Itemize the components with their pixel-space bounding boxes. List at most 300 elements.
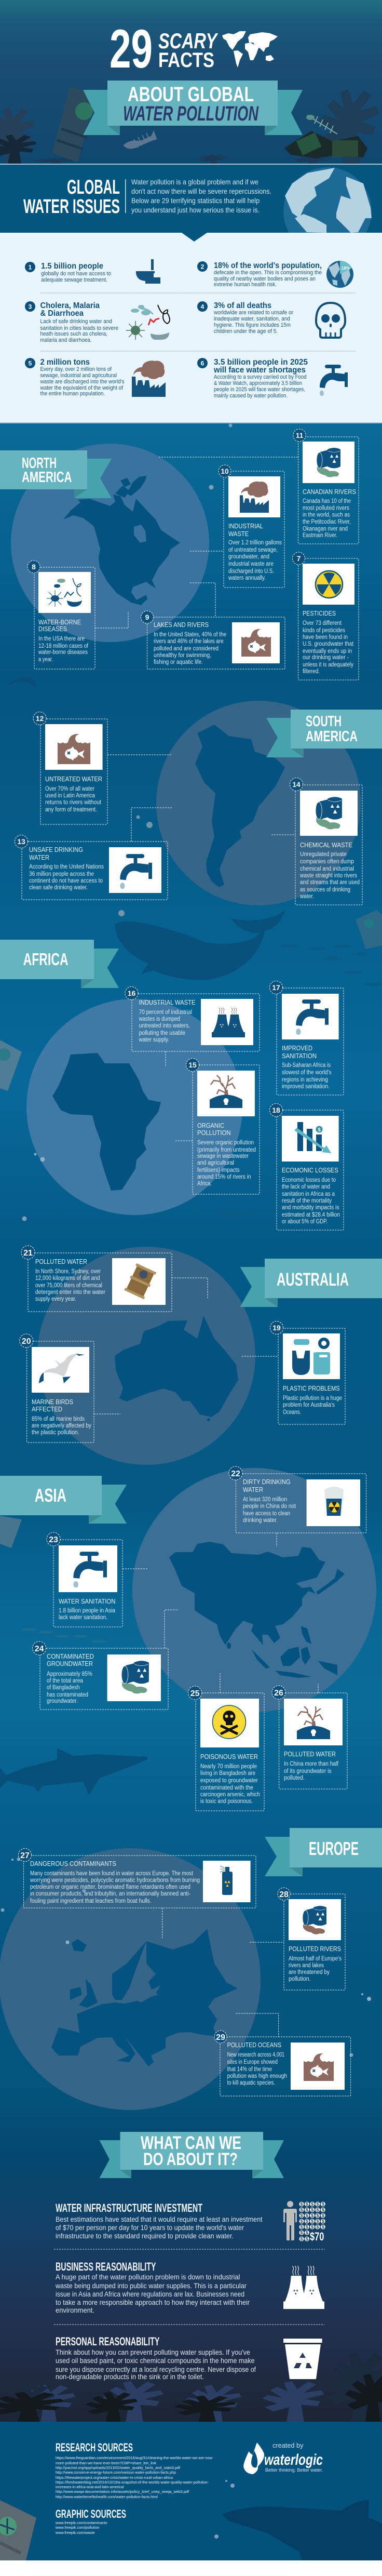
card 9: lakes and rivers: In the United States, 40% of the [154, 632, 226, 638]
ribbon: north america [0, 450, 112, 498]
issue 1: globally do not have access to [41, 271, 111, 277]
card 11: canadian rivers: 11 [296, 431, 304, 439]
issue 3: Cholera, Malaria [40, 301, 100, 310]
text: research sources: https://thewaterproject.org/water-crisis/water-in-crisis-rural-urban-africa [56, 2475, 173, 2480]
card 20: marine birds affected: MARINE BIRDS [32, 1398, 73, 1406]
block: personal responsibility: used oil based paint, or toxic chemical compounds in the home make [56, 2357, 255, 2365]
issue 1: 1 [29, 264, 32, 271]
ribbon: australia: AUSTRALIA [277, 1270, 349, 1290]
card 25: poisonous water: 25 [190, 1689, 200, 1698]
icon: falling bar chart [294, 1122, 331, 1153]
icon: dollar coins and $70: $$$$$ [300, 2219, 324, 2224]
card 13: unsafe drinking water [15, 835, 168, 900]
card 27: dangerous contaminants: in consumer products, and tributyltin, an internationally banned anti- [30, 1891, 190, 1897]
ribbon: about global water pollution: ABOUT GLOBAL [128, 83, 254, 106]
issue 6: people in 2025 will face water shortages, [214, 386, 305, 393]
card 24: contaminated groundwater: of the total area [47, 1678, 84, 1684]
icon: seabird [39, 1354, 85, 1383]
heading: global water issues [23, 176, 120, 218]
illustration: shark [0, 1748, 147, 1795]
card 22: dirty drinking water: people in China do not [243, 1503, 296, 1510]
card 13: unsafe drinking water: clean safe drinking water. [29, 885, 88, 891]
card 11: canadian rivers: the Petitcodiac River, [303, 519, 351, 525]
icon: floating bottles [284, 131, 367, 158]
card 27: dangerous contaminants: DANGEROUS CONTAMINANTS [30, 1860, 116, 1867]
issue 2: 18% of the world's population, [214, 261, 322, 270]
card 8: water-borne diseases: In the USA there are [38, 636, 85, 642]
block: water infrastructure investment [56, 2201, 324, 2243]
issue 4: inadequate water, sanitation, and [214, 316, 290, 322]
card 29: polluted oceans [214, 2031, 351, 2096]
card 18: economic losses: result of the mortality [282, 1198, 332, 1204]
card 7: pesticides: unless it is adequately [303, 662, 353, 668]
card 21: polluted water: detergent enter into the water [35, 1289, 105, 1296]
card 21: polluted water [21, 1246, 172, 1312]
issue 4: 4 [201, 303, 204, 311]
card 13: unsafe drinking water: 36 million people across the [29, 871, 94, 877]
card 28: polluted rivers: 28 [279, 1890, 289, 1899]
ribbon: asia [0, 1476, 127, 1524]
issue 3 [25, 301, 170, 343]
card 18: economic losses: or about 5% of GDP. [282, 1219, 328, 1225]
card 7: pesticides: eventually ends up in [303, 648, 352, 655]
icon: person [283, 2201, 297, 2240]
illustration: shark [222, 2500, 382, 2560]
card 25: poisonous water: is toxic and poisonous. [200, 1798, 253, 1805]
card 9: lakes and rivers: 9 [145, 613, 149, 621]
issue 3: heath issues such as cholera, [40, 331, 107, 337]
card 16: industrial waste: untreated into waters, [139, 1023, 190, 1029]
icon: dollar coins and $70: $$$$$ [300, 2213, 324, 2218]
card 14: chemical waste: and streams that are used [300, 879, 360, 886]
card 7: pesticides: U.S. groundwater that [303, 641, 354, 647]
card 28: polluted rivers [278, 1888, 345, 1990]
text: research sources [56, 2441, 213, 2499]
icon: microbes [126, 305, 170, 340]
card 29: polluted oceans: that 14% of the time [227, 2066, 272, 2073]
card 8: water-borne diseases: water-borne diseases [38, 649, 88, 656]
icon: fish skeleton [124, 131, 157, 149]
icon: dollar coins and $70: $$$$$ [300, 2201, 324, 2207]
card 8: water-borne diseases [28, 560, 95, 669]
issue 5: the entire human population. [40, 391, 105, 397]
issue 6: will face water shortages [213, 366, 306, 375]
card 15: organic pollution [186, 1059, 260, 1194]
card 24: contaminated groundwater: 24 [35, 1645, 44, 1653]
map: north america [45, 476, 180, 605]
text: research sources: http://www.conserve-energy-future.com/various-water-pollution-facts.php [56, 2470, 176, 2475]
issue 2: quality of nearby water bodies and poses an [214, 276, 316, 282]
card 28: polluted rivers: are threatened by [289, 1969, 330, 1976]
ribbon: north america: NORTH [22, 455, 57, 472]
block: personal responsibility: non-degradable products in the sink or in the toilet. [56, 2373, 204, 2381]
icon: radiation sign [316, 571, 343, 598]
card 13: unsafe drinking water: continent do not have access to [29, 878, 103, 884]
card 14: chemical waste: as sources of drinking [300, 887, 350, 893]
card 28: polluted rivers: rivers and lakes [289, 1963, 324, 1969]
icon: dollar coins and $70: $$ [300, 2230, 308, 2235]
icon: falling bar chart: $ [318, 1127, 321, 1133]
card 14: chemical waste: CHEMICAL WASTE [300, 842, 352, 849]
card 7: pesticides: kinds of pesticides [303, 628, 345, 634]
card 18: economic losses: 18 [272, 1106, 280, 1114]
text: research sources: https://freshwaterblog.net/2016/10/19/a-snapshot-of-the-worlds-water-quality-water-pollution- [56, 2480, 209, 2485]
card 23: water sanitation: lack water sanitation. [59, 1614, 107, 1621]
panel: ocean background [0, 423, 382, 2422]
block: water infrastructure investment: WATER INFRASTRUCTURE INVESTMENT [56, 2201, 202, 2214]
issue 2: 2 [201, 263, 204, 270]
block: water infrastructure investment: infrastructure to the standard required to provide clean water. [56, 2232, 234, 2240]
card 15: organic pollution: POLLUTION [197, 1129, 231, 1137]
card 26: polluted water: polluted. [284, 1775, 305, 1781]
ribbon: about global water pollution: WATER POLLUTION [123, 102, 259, 125]
card 28: polluted rivers: pollution. [289, 1976, 311, 1982]
issue 6: mainly caused by water pollution. [214, 393, 288, 399]
card 10: industrial waste: Over 1.2 trillion gallons [228, 540, 282, 546]
block: personal responsibility: Think about how you can prevent polluting water supplies. If you've [56, 2348, 250, 2356]
issue 1: adequate sewage treatment. [41, 277, 107, 283]
panel: what can we do [54, 2132, 324, 2381]
map: south america [195, 725, 285, 887]
logo: created by waterlogic [243, 2441, 323, 2474]
card 10: industrial waste [219, 465, 284, 588]
issue 6: According to a survey carried out by Food [214, 374, 307, 380]
text: graphic sources: www.freepik.com/waste [55, 2530, 95, 2535]
issue 5: Every day, over 2 million tons of [40, 366, 112, 372]
card 11: canadian rivers: Eastmain River. [303, 532, 337, 539]
card 12: untreated water: returns to rivers without [45, 799, 102, 806]
text: intro: Water pollution is a global problem and if we [131, 178, 258, 186]
block: business responsibility: waste being dumped into public water supplies. This is a particular [55, 2282, 247, 2290]
card 12: untreated water: 12 [36, 714, 44, 723]
card 11: canadian rivers: Okanagan river and [303, 526, 348, 532]
title: 29 scary facts: FACTS [158, 49, 214, 72]
icon: dollar coins and $70: $70 [310, 2230, 324, 2243]
text: research sources: http://pacinst.org/app/uploads/2013/02/water_quality_facts_and_stats3.pdf [56, 2465, 181, 2470]
icon: plastic waste [292, 1339, 330, 1375]
card 16: industrial waste: 70 percent of industrial [139, 1009, 192, 1016]
icon: dollar coins and $70 [300, 2201, 324, 2243]
ribbon: south america [266, 710, 382, 757]
card 11: canadian rivers: CANADIAN RIVERS [303, 488, 356, 496]
card 7: pesticides: our drinking water - [303, 655, 349, 661]
ribbon: asia: ASIA [35, 1485, 66, 1506]
text: research sources: http://www.wwqa-documentation.info/assets/policy_brief_unep_wwqa_web3.pdf [56, 2489, 189, 2494]
card 7: pesticides: have been found in [303, 634, 348, 640]
icon: microbes [47, 578, 82, 607]
card 19: plastic problems: PLASTIC PROBLEMS [283, 1385, 339, 1392]
card 29: polluted oceans: POLLUTED OCEANS [227, 2041, 281, 2049]
card 18: economic losses: and morbidity impacts is [282, 1205, 339, 1211]
issue 3: sanitation in cities leads to severe [40, 325, 118, 331]
card 27: dangerous contaminants: worrying were pesticides, polycyclic aromatic hydrocarbons from burning [30, 1877, 200, 1884]
card 10: industrial waste: groundwater, and [228, 554, 269, 560]
card 17: improved sanitation: SANITATION [282, 1052, 317, 1060]
card 22: dirty drinking water: WATER [243, 1486, 263, 1493]
issue 6: & Water Watch, approximately 3.5 billion [214, 380, 302, 386]
issue 3: Lack of safe drinking water and [40, 318, 112, 325]
card 24: contaminated groundwater: Approximately 85% [47, 1671, 92, 1677]
map: australia [115, 1316, 238, 1421]
card 8: water-borne diseases: 12-18 million cases of [38, 643, 89, 649]
card 27: dangerous contaminants: 27 [20, 1851, 30, 1860]
card 13: unsafe drinking water: According to the United Nations [29, 864, 104, 870]
card 12: untreated water: Over 70% of all water [45, 786, 94, 792]
icon: contaminated glass [324, 1487, 344, 1516]
icon: recycling bin [283, 2339, 322, 2379]
card 12: untreated water: used in Latin America [45, 793, 96, 799]
issue 2: defecate in the open. This is compromising the [214, 270, 322, 276]
card 18: economic losses [270, 1103, 344, 1230]
panel: global issues list [0, 233, 382, 423]
card 11: canadian rivers: in the world, such as [303, 512, 350, 518]
card 25: poisonous water: carcinogen arsenic, which [200, 1792, 260, 1798]
card 17: improved sanitation [270, 981, 344, 1095]
block: personal responsibility: sure you dispose correctly at a local recycling centre. Never dispose of [56, 2366, 256, 2373]
illustration: seabed kelp [0, 2352, 382, 2422]
card 21: polluted water: supply every year. [35, 1296, 76, 1302]
card 13: unsafe drinking water: WATER [29, 854, 49, 861]
text: intro: you understand just how serious the issue is. [131, 206, 260, 214]
icon: factory [132, 361, 166, 397]
card 24: contaminated groundwater: groundwater. [47, 1698, 78, 1704]
card 22: dirty drinking water: drinking water. [243, 1517, 278, 1524]
icon: dollar coins and $70: $$ [300, 2236, 308, 2241]
text: graphic sources: GRAPHIC SOURCES [56, 2507, 126, 2520]
card 20: marine birds affected: 20 [22, 1337, 31, 1346]
card 10: industrial waste: waters annually. [228, 575, 266, 581]
card 18: economic losses: the lack of water and [282, 1184, 330, 1190]
issue 1: 1.5 billion people [41, 262, 103, 271]
block: water infrastructure investment: of $70 per person per day for 10 years to update the world's water [56, 2224, 244, 2232]
card 10: industrial waste: industrial waste are [228, 561, 274, 567]
card 29: polluted oceans: sites in Europe showed [227, 2059, 278, 2065]
icon: white world map [222, 31, 278, 68]
card 14: chemical waste: companies often dump [300, 859, 354, 865]
panel: south america [8, 677, 382, 905]
icon: brown barrel [124, 1263, 156, 1299]
panel: sources footer [0, 2422, 382, 2560]
card 26: polluted water: POLLUTED WATER [284, 1751, 336, 1758]
panel: australia [20, 1246, 382, 1465]
issue 3: 3 [29, 303, 32, 311]
card 22: dirty drinking water: DIRTY DRINKING [243, 1478, 291, 1486]
card 15: organic pollution: and agricultural [197, 1160, 234, 1166]
card 10: industrial waste: WASTE [228, 530, 249, 538]
block: business responsibility [55, 2260, 324, 2314]
card 17: improved sanitation: slowest of the world's [282, 1070, 332, 1076]
card 29: polluted oceans: pollution was high enough [227, 2073, 287, 2079]
ribbon: africa: AFRICA [23, 950, 69, 969]
text: research sources: http://www.waterbenefitshealth.com/water-pollution-facts.html [56, 2494, 158, 2499]
card 17: improved sanitation: Sub-Saharan Africa is [282, 1062, 331, 1069]
card 19: plastic problems [270, 1322, 345, 1424]
card 12: untreated water [33, 712, 107, 824]
ribbon: africa [0, 940, 119, 988]
issue 5: 2 million tons [40, 358, 90, 367]
card 26: polluted water: of its groundwater is [284, 1768, 332, 1774]
illustration: faint fish school [21, 1628, 106, 1643]
issue 4: 3% of all deaths [214, 301, 271, 310]
card 21: polluted water: POLLUTED WATER [35, 1258, 87, 1265]
card 23: water sanitation [47, 1532, 122, 1627]
card 26: polluted water: 26 [274, 1689, 283, 1698]
card 13: unsafe drinking water: UNSAFE DRINKING [29, 846, 83, 853]
logo: created by waterlogic: created by [272, 2441, 304, 2449]
map: africa [52, 1053, 161, 1191]
block: business responsibility: issue in Asia and Africa where regulations are lax. Businesses need [56, 2290, 244, 2298]
title: 29 scary facts: SCARY [158, 29, 219, 53]
card 21: polluted water: In North Shore, Sydney, over [35, 1269, 101, 1275]
issue 4: hygiene. This figure includes 15m [214, 322, 291, 328]
card 16: industrial waste [125, 987, 260, 1051]
issue 4 [197, 301, 345, 338]
issue 3: & Diarrhoea [40, 309, 84, 318]
block: personal responsibility [56, 2335, 322, 2381]
card 11: canadian rivers [293, 429, 359, 544]
icon: toilet [136, 259, 160, 284]
card 9: lakes and rivers: fishing or aquatic life. [154, 659, 203, 665]
card 7: pesticides [293, 552, 359, 680]
panel: north america [0, 424, 359, 680]
card 19: plastic problems: 19 [272, 1324, 281, 1332]
card 28: polluted rivers: POLLUTED RIVERS [289, 1945, 341, 1953]
card 20: marine birds affected: 85% of all marine birds [32, 1416, 85, 1422]
card 20: marine birds affected: AFFECTED [32, 1406, 62, 1413]
icon: dollar coins and $70: $$$$$ [300, 2224, 324, 2230]
heading: global water issues: GLOBAL [67, 176, 120, 198]
icon: faint dolphin [8, 677, 36, 688]
card 19: plastic problems: problem for Australia's [283, 1402, 335, 1408]
issue 5: water the equivalent of the weight of [40, 385, 124, 391]
card 20: marine birds affected: are negatively affected by [32, 1423, 91, 1429]
card 25: poisonous water: POISONOUS WATER [200, 1753, 258, 1760]
card 27: dangerous contaminants: petroleum or organic matter, brominated flame retardants often used [30, 1884, 190, 1890]
map: asia [169, 1542, 345, 1678]
card 25: poisonous water: exposed to groundwater [200, 1778, 258, 1784]
text: intro: Below are 29 terrifying statistics that will help [131, 196, 260, 205]
card 12: untreated water: UNTREATED WATER [45, 776, 102, 783]
card 8: water-borne diseases: DISEASES [38, 625, 67, 633]
card 22: dirty drinking water [229, 1466, 366, 1533]
card 29: polluted oceans: New research across 4,001 [227, 2052, 284, 2058]
card 15: organic pollution: Africa. [197, 1181, 212, 1187]
card 11: canadian rivers: Canada has 10 of the [303, 498, 351, 504]
card 7: pesticides: Over 73 different [303, 620, 342, 626]
card 10: industrial waste: discharged into U.S. [228, 568, 274, 575]
card 10: industrial waste: 10 [221, 467, 229, 475]
card 9: lakes and rivers: LAKES AND RIVERS [154, 621, 209, 629]
card 23: water sanitation: WATER SANITATION [59, 1598, 115, 1605]
card 22: dirty drinking water: 22 [231, 1470, 240, 1478]
card 21: polluted water: 12,000 kilograms of dirt and [35, 1275, 100, 1282]
card 19: plastic problems: Oceans. [283, 1409, 301, 1416]
card 28: polluted rivers: Almost half of Europe's [289, 1956, 342, 1962]
card 15: organic pollution: Severe organic pollution [197, 1140, 254, 1146]
text: research sources: RESEARCH SOURCES [56, 2441, 133, 2454]
icon: dollar coins and $70: $$$$$ [300, 2207, 324, 2212]
card 29: polluted oceans: 29 [216, 2033, 225, 2042]
card 20: marine birds affected [20, 1334, 94, 1443]
text: research sources: more-polluted-than-we-have-ever-been?CMP=share_btn_link [56, 2461, 156, 2465]
card 24: contaminated groundwater: of Bangladesh [47, 1685, 80, 1691]
card 13: unsafe drinking water: 13 [17, 837, 25, 846]
card 17: improved sanitation: improved sanitation. [282, 1084, 330, 1090]
ribbon: south america: SOUTH [306, 713, 342, 730]
card 21: polluted water: over 75,000 liters of chemical [35, 1283, 102, 1289]
panel: global water issues band [0, 165, 382, 233]
card 14: chemical waste [290, 778, 362, 905]
icon: globe [283, 167, 372, 233]
icon: dripping tap [320, 365, 348, 396]
issue 5 [25, 358, 166, 397]
title: 29 scary facts: 29 [110, 19, 153, 79]
text: intro [131, 178, 271, 214]
card 7: pesticides: PESTICIDES [303, 610, 336, 617]
card 10: industrial waste: INDUSTRIAL [228, 523, 263, 530]
issue 5: 5 [29, 359, 32, 367]
issue 4: children under the age of 5. [214, 328, 278, 335]
card 24: contaminated groundwater: CONTAMINATED [47, 1653, 94, 1660]
card 15: organic pollution: ORGANIC [197, 1122, 224, 1129]
card 25: poisonous water [188, 1686, 264, 1811]
icon: cooling towers [283, 2266, 324, 2309]
heading: global water issues: WATER ISSUES [23, 196, 120, 218]
panel: africa [0, 940, 344, 1230]
icon: faint barrel left [0, 1040, 22, 1091]
card 14: chemical waste: water. [299, 893, 314, 900]
icon: biohazard barrel [0, 2500, 36, 2560]
card 25: poisonous water: living in Bangladesh are [200, 1770, 255, 1777]
ribbon: europe [265, 1828, 382, 1876]
ribbon: what can we do about it: DO ABOUT IT? [143, 2150, 238, 2169]
card 27: dangerous contaminants: fouling paint ingredient that leaches from boat hulls. [30, 1898, 152, 1904]
card 18: economic losses: sanitation in Africa as a [282, 1191, 335, 1197]
card 21: polluted water: 21 [23, 1249, 33, 1258]
block: personal responsibility: PERSONAL REASONABILITY [56, 2335, 160, 2348]
card 23: water sanitation: 1.8 billion people in Asia [59, 1608, 116, 1614]
card 24: contaminated groundwater: GROUNDWATER [47, 1660, 93, 1667]
card 27: dangerous contaminants [19, 1848, 256, 1908]
card 15: organic pollution: around 15% of rivers in [197, 1174, 251, 1180]
issue 6: 3.5 billion people in 2025 [214, 358, 308, 367]
ribbon: what can we do about it: WHAT CAN WE [141, 2133, 241, 2153]
icon: small globe 18% [326, 261, 353, 288]
icon: sunken biohazard barrel [52, 86, 95, 162]
illustration: whale [115, 910, 285, 980]
card 8: water-borne diseases: a year. [38, 657, 53, 663]
card 16: industrial waste: INDUSTRIAL WASTE [139, 999, 195, 1006]
logo: created by waterlogic: Better thinking. Better water. [265, 2467, 323, 2473]
card 17: improved sanitation: regions in achieving [282, 1077, 328, 1083]
card 14: chemical waste: Unregulated private [300, 851, 347, 858]
card 29: polluted oceans: to kill aquatic species. [227, 2080, 275, 2086]
card 15: organic pollution: sewage in wastewater [197, 1153, 249, 1159]
card 9: lakes and rivers: unhealthy for swimming, [154, 652, 211, 659]
block: business responsibility: environment. [56, 2306, 94, 2314]
issue 1 [25, 259, 160, 284]
card 18: economic losses: ECOMONIC LOSSES [282, 1167, 338, 1174]
card 19: plastic problems: Plastic pollution is a huge [283, 1395, 342, 1402]
issue 6 [197, 358, 348, 399]
text: graphic sources: www.freepik.com/contaminants [55, 2520, 107, 2525]
card 14: chemical waste: 14 [292, 780, 301, 789]
text: graphic sources [55, 2507, 126, 2535]
panel: header [0, 0, 382, 164]
card 9: lakes and rivers: polluted and are considered [154, 646, 219, 652]
icon: faint barrel left [0, 1516, 22, 1548]
card 26: polluted water [272, 1686, 347, 1789]
